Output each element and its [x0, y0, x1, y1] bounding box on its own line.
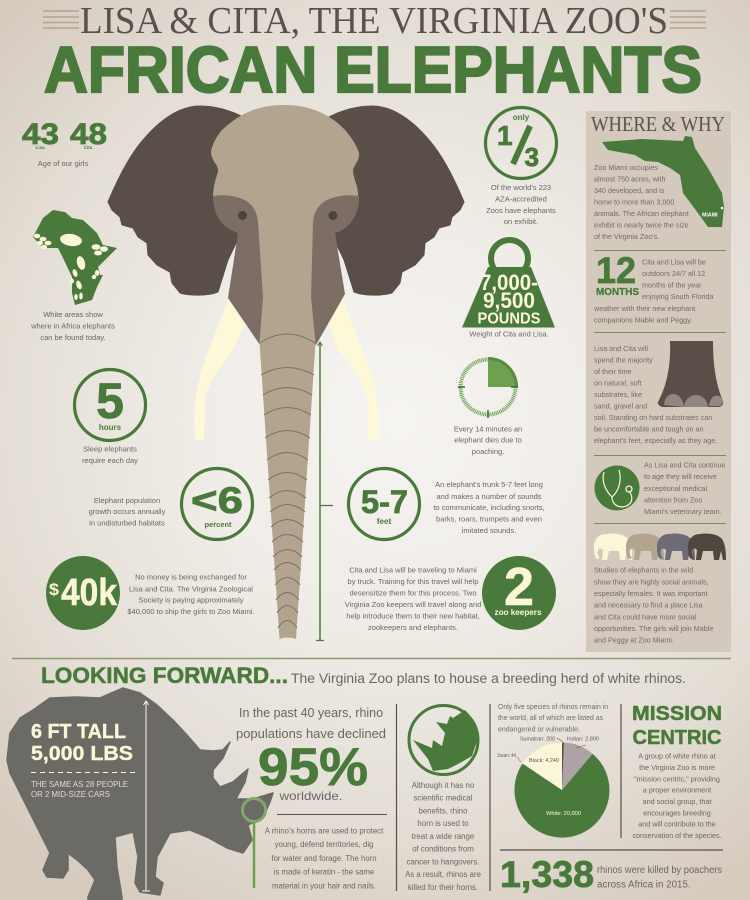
- text: soft substrates: spend the majority: [594, 356, 653, 364]
- text: medical attention: attention from Zoo: [644, 496, 702, 504]
- stat: 1,338 poached: [500, 854, 722, 895]
- stat: 1,338 poached: rhinos were killed by poachers: [597, 865, 722, 876]
- stat: 1,338 poached: across Africa in 2015.: [597, 880, 691, 890]
- title: LISA & CITA, THE VIRGINIA ZOO'S: [80, 0, 668, 42]
- text: rhino horn myth: horn is used to: [417, 819, 469, 828]
- panel: mission centric: CENTRIC: [632, 727, 722, 749]
- text: horn uses: A rhino's horns are used to protect: [265, 826, 384, 836]
- stat: one third of zoos: [486, 108, 556, 226]
- pie chart: rhino species: Javan: 44: [497, 753, 516, 759]
- text: five species: [498, 702, 608, 734]
- height arrow: [142, 701, 150, 891]
- rhino silhouette: [7, 688, 273, 900]
- text: rhino horn myth: killed for their horns.: [408, 883, 478, 892]
- text: medical attention: As Lisa and Cita continue: [644, 460, 726, 470]
- panel: mission centric: and social group, that: [643, 797, 711, 806]
- stat: 95 percent decline: populations have declined: [236, 726, 386, 741]
- stat: 5 hours sleep: 5: [96, 373, 124, 429]
- panel: mission centric: the Virginia Zoo is more: [639, 763, 715, 772]
- stat: 5 hours sleep: require each day: [82, 456, 138, 465]
- text: Zoo Miami: [594, 163, 689, 241]
- text: social animals: and Cita could have more social: [594, 612, 697, 622]
- stat: 1,338 poached: 1,338: [500, 854, 594, 895]
- stat: trunk 5-7 feet: [348, 468, 545, 540]
- elephant head illustration: [108, 105, 464, 639]
- stat: under 6 percent: Elephant population: [94, 496, 160, 505]
- stat: trunk 5-7 feet: to communicate, including snorts,: [433, 503, 545, 512]
- stat: 12 months: Cita and Lisa will be: [642, 258, 706, 266]
- text: Zoo Miami: home to more than 3,000: [594, 198, 674, 206]
- stat: 2 zoo keepers: zookeepers and elephants.: [368, 623, 458, 632]
- stat: 95 percent decline: In the past 40 years, rhino: [239, 705, 383, 720]
- pie chart: rhino species: Indian: 2,800: [567, 736, 599, 742]
- stat: weight icon: 9,500: [483, 288, 535, 313]
- face shading: [213, 196, 359, 345]
- text: rhino horn myth: [405, 781, 481, 892]
- stat: 5 hours sleep: hours: [99, 423, 122, 432]
- panel: mission centric: encourages breeding: [643, 808, 711, 818]
- stat: one third of zoos: AZA-accredited: [495, 194, 547, 204]
- text: social animals: and Peggy at Zoo Miami.: [594, 636, 674, 644]
- stat: 40k shipping cost: [46, 556, 255, 630]
- stat: one third of zoos: 3: [524, 142, 539, 172]
- text: Zoo Miami: Zoo Miami occupies: [594, 163, 658, 172]
- text: soft substrates: [594, 344, 717, 445]
- text: rhino horn myth: Although it has no: [412, 781, 475, 790]
- eyes: [238, 211, 247, 220]
- text: horn uses: young, defend territories, dig: [275, 840, 373, 849]
- text: Zoo Miami: of the Virginia Zoo's.: [594, 232, 659, 241]
- title: [43, 0, 706, 106]
- text: horn uses: is made of keratin - the same: [274, 868, 374, 876]
- icon: Florida map: MIAMI: [702, 212, 718, 218]
- text: medical attention: exceptional medical: [644, 484, 708, 493]
- icon: rhino head in circle: [409, 706, 478, 774]
- stat: under 6 percent: <6: [191, 480, 243, 521]
- text: rhino horn myth: cancer to hangovers.: [407, 858, 479, 866]
- text: Zoo Miami: exhibit is nearly twice the size: [594, 220, 689, 230]
- stat: trunk 5-7 feet: feet: [377, 517, 391, 526]
- text: soft substrates: on natural, soft: [594, 378, 642, 388]
- stat: 5 hours sleep: Sleep elephants: [83, 444, 137, 454]
- rhino stats: [31, 721, 135, 799]
- stat: weight icon: [462, 240, 555, 338]
- stat: 95 percent decline: worldwide.: [278, 789, 342, 803]
- trunk wrinkles: [260, 334, 315, 628]
- text: soft substrates: substrates, like: [594, 390, 642, 399]
- stat: 12 months: [593, 250, 714, 324]
- icon: four elephants: [594, 533, 726, 560]
- text: social animals: show they are highly social animals,: [594, 578, 709, 586]
- stat: one third of zoos: Zoos have elephants: [486, 206, 556, 215]
- stat: ages: Cita: [84, 145, 93, 150]
- panel: mission centric: and will contribute to the: [638, 820, 716, 828]
- stat: one third of zoos: 1: [497, 120, 513, 151]
- stat: 40k shipping cost: Society is paying approximately: [138, 596, 244, 604]
- text: horn uses: material in your hair and nails.: [272, 882, 376, 890]
- icon: poaching clock: Every 14 minutes an: [454, 424, 522, 434]
- stat: one third of zoos: only: [513, 113, 530, 122]
- stat: 2 zoo keepers: by truck. Training for this travel will help: [348, 577, 478, 586]
- panel: mission centric: A group of white rhino at: [638, 752, 716, 760]
- text: soft substrates: soil. Standing on hard substrates can: [594, 413, 712, 422]
- stat: 12 months: enjoying South Florida: [642, 292, 714, 301]
- stat: 12 months: companions Mable and Peggy.: [594, 316, 692, 324]
- stat: weight icon: Weight of Cita and Lisa.: [469, 330, 549, 338]
- rhino stats: OR 2 MID-SIZE CARS: [31, 790, 110, 799]
- stat: 40k shipping cost: Lisa and Cita. The Virginia Zoological: [129, 584, 253, 594]
- text: rhino horn myth: of conditions from: [412, 844, 474, 854]
- text: rhino horn myth: benefits, rhino: [419, 806, 468, 816]
- pie chart: rhino species: White: 20,000: [546, 811, 581, 817]
- heading: looking forward: [41, 663, 686, 688]
- stat: 95 percent decline: 95%: [258, 738, 368, 797]
- left tusk: [194, 298, 250, 440]
- pie chart: rhino species: Black: 4,240: [529, 758, 559, 764]
- stat: trunk 5-7 feet: and makes a number of sounds: [436, 492, 542, 501]
- stat: under 6 percent: percent: [204, 520, 232, 529]
- panel: where and why: [586, 111, 731, 652]
- stat: trunk 5-7 feet: imitated sounds.: [462, 526, 516, 535]
- text: Zoo Miami: animals. The African elephant: [594, 209, 689, 218]
- icon: poaching clock: [454, 357, 522, 456]
- stat: 40k shipping cost: $: [49, 580, 60, 599]
- text: five species: the world, all of which are listed as: [498, 713, 603, 722]
- stat: 40k shipping cost: $40,000 to ship the girls to Zoo Miami.: [127, 607, 255, 616]
- text: five species: Only five species of rhinos remain in: [498, 702, 608, 711]
- stat: 2 zoo keepers: zoo keepers: [494, 607, 542, 617]
- rhino stats: THE SAME AS 28 PEOPLE: [31, 780, 128, 789]
- head and trunk: [211, 105, 359, 639]
- stat: 12 months: outdoors 24/7 all 12: [642, 269, 705, 278]
- text: soft substrates: elephant's feet, especially as they age.: [594, 436, 717, 445]
- stat: 2 zoo keepers: Cita and Lisa will be traveling to Miami: [349, 566, 477, 574]
- stat: 2 zoo keepers: [345, 556, 556, 632]
- panel: mission centric: "mission centric," providing: [634, 774, 720, 784]
- stat: under 6 percent: [89, 468, 252, 540]
- icon: elephant foot: [658, 341, 723, 407]
- stat: ages: 48: [70, 118, 107, 151]
- stat: 12 months: 12: [596, 250, 636, 291]
- stat: 12 months: months of the year: [642, 280, 702, 290]
- stat: ages: Lisa: [35, 145, 45, 150]
- trunk length measure line: [316, 342, 333, 640]
- text: rhino horn myth: treat a wide range: [412, 832, 474, 841]
- panel: mission centric: conservation of the species.: [632, 831, 722, 840]
- text: Zoo Miami: 340 developed, and is: [594, 186, 665, 195]
- panel: mission centric: [632, 703, 722, 840]
- text: rhino horn myth: As a result, rhinos are: [405, 870, 481, 879]
- stat: 95 percent decline: [236, 705, 387, 814]
- text: medical attention: [644, 460, 726, 516]
- icon: poaching clock: elephant dies due to: [454, 436, 522, 444]
- stat: 2 zoo keepers: desensitize them for this process. Two: [349, 588, 477, 598]
- icon: Florida map: [602, 136, 724, 227]
- text: social animals: Studies of elephants in the wild: [594, 566, 693, 574]
- stat: 2 zoo keepers: Virginia Zoo keepers will travel along and: [345, 600, 481, 609]
- heading: where and why: WHERE & WHY: [591, 112, 725, 136]
- panel: mission centric: a proper environment: [643, 786, 711, 794]
- caption: Africa map: can be found today.: [40, 333, 106, 342]
- caption: Africa map: White areas show: [43, 310, 103, 319]
- icon: poaching clock: poaching.: [472, 447, 504, 456]
- stat: 12 months: weather with their new elephant: [593, 304, 695, 313]
- text: soft substrates: Lisa and Cita will: [594, 344, 648, 353]
- pie chart: rhino species: [497, 736, 609, 838]
- stat: weight icon: POUNDS: [478, 310, 541, 328]
- stat: 2 zoo keepers: 2: [504, 557, 534, 617]
- stat: 12 months: MONTHS: [596, 287, 639, 298]
- stat: 40k shipping cost: No money is being exchanged for: [135, 572, 247, 582]
- text: horn uses: for water and forage. The horn: [271, 854, 377, 863]
- text: soft substrates: be uncomfortable and tough on an: [594, 424, 704, 434]
- rhino stats: 5,000 LBS: [31, 743, 133, 765]
- text: medical attention: to age they will receive: [644, 472, 717, 481]
- panel: mission centric: MISSION: [632, 703, 722, 725]
- stat: 40k shipping cost: 40k: [61, 572, 118, 614]
- icon: map of Africa: [33, 210, 117, 305]
- stat: trunk 5-7 feet: An elephant's trunk 5-7 feet long: [435, 480, 543, 489]
- icon: stethoscope: [594, 466, 640, 510]
- caption: Africa map: where in Africa elephants: [30, 322, 115, 330]
- stat: 2 zoo keepers: help introduce them to their new habitat,: [346, 612, 480, 620]
- pie chart: rhino species: Sumatran: 200: [520, 736, 555, 742]
- text: medical attention: Miami's veterinary team.: [644, 507, 722, 516]
- stat: under 6 percent: in undisturbed habitats: [89, 518, 165, 528]
- text: rhino horn myth: scientific medical: [414, 794, 473, 802]
- caption: Africa map: [30, 310, 115, 342]
- text: social animals: especially females. It was important: [594, 589, 707, 598]
- right tusk: [324, 298, 379, 440]
- stat: ages: [22, 118, 107, 168]
- left ear: [108, 106, 245, 295]
- stat: trunk 5-7 feet: barks, roars, trumpets and even: [436, 514, 542, 524]
- heading: looking forward: The Virginia Zoo plans to house a breeding herd of white rhinos.: [291, 671, 686, 686]
- text: social animals: [594, 566, 713, 644]
- stat: one third of zoos: Of the world's 223: [491, 183, 551, 192]
- text: horn uses: [265, 826, 384, 890]
- horn callout marker: [242, 798, 266, 888]
- right ear: [327, 106, 464, 295]
- text: five species: endangered or vulnerable.: [498, 724, 580, 734]
- stat: one third of zoos: on exhibit.: [504, 217, 538, 226]
- stat: ages: Age of our girls: [38, 159, 88, 168]
- stat: under 6 percent: growth occurs annually: [89, 507, 166, 516]
- text: social animals: and necessary to find a place Lisa: [594, 600, 703, 610]
- rhino stats: 6 FT TALL: [31, 721, 126, 743]
- stat: trunk 5-7 feet: 5-7: [361, 484, 408, 520]
- text: social animals: opportunities. The girls will join Mable: [594, 624, 713, 633]
- stat: 5 hours sleep: [74, 370, 146, 465]
- heading: looking forward: LOOKING FORWARD...: [41, 663, 288, 688]
- title: AFRICAN ELEPHANTS: [44, 33, 702, 106]
- text: soft substrates: sand, gravel and: [594, 402, 647, 410]
- stat: weight icon: 7,000-: [480, 270, 538, 295]
- text: Zoo Miami: almost 750 acres, with: [594, 174, 666, 184]
- text: soft substrates: of their time: [594, 367, 632, 376]
- stat: ages: 43: [22, 118, 59, 151]
